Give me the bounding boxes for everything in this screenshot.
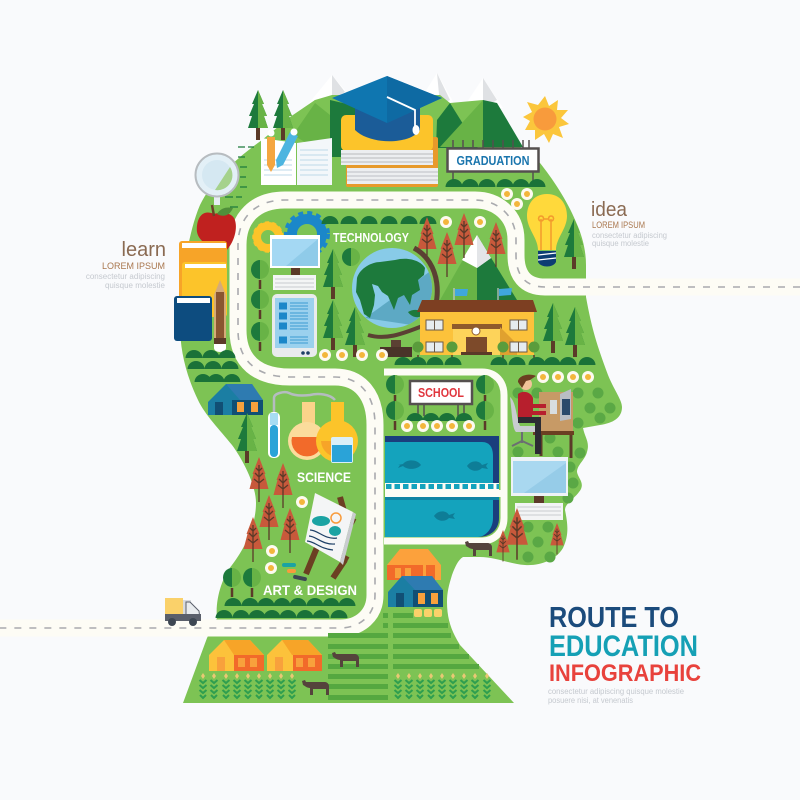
learn text block: learn	[122, 239, 166, 261]
icon: graduation books	[341, 115, 438, 187]
learn text block: LOREM IPSUM	[102, 261, 165, 271]
main road	[0, 200, 800, 628]
title: INFOGRAPHIC	[549, 660, 701, 687]
title caption: consectetur adipiscing quisque molestie	[548, 687, 685, 696]
technology label: TECHNOLOGY	[333, 231, 410, 245]
idea text block: LOREM IPSUM	[592, 220, 645, 230]
corn rows	[200, 673, 490, 698]
trees and bushes in technology section	[251, 216, 436, 357]
school building	[417, 288, 537, 355]
icon: truck	[165, 598, 201, 626]
person at desk	[510, 375, 574, 458]
title caption: posuere nisi, at venenatis	[548, 696, 633, 705]
flowers and bushes along technology base	[319, 349, 596, 365]
orange house	[387, 549, 441, 580]
icon: tree by bulb	[564, 219, 584, 269]
learn text block: consectetur adipiscing	[86, 272, 165, 281]
large monitor and keyboard	[511, 457, 568, 520]
pond with fish and bridge	[385, 436, 503, 537]
icon: cow by pond	[465, 541, 492, 556]
graduation sign: GRADUATION	[456, 154, 530, 168]
secondary road around school pond	[384, 372, 504, 541]
small shrubs at school	[412, 342, 540, 362]
title: EDUCATION	[549, 630, 698, 663]
bushes under sign	[446, 179, 546, 187]
field dashes near magnifier	[222, 147, 254, 207]
cows in field	[302, 652, 359, 695]
science label: SCIENCE	[297, 469, 351, 485]
icon: learn books	[174, 241, 227, 341]
school sign and trees	[386, 375, 494, 432]
field stripes	[328, 613, 479, 700]
learn text block	[86, 239, 166, 290]
flowers near bulb	[501, 188, 533, 210]
mountains behind head top	[280, 73, 503, 135]
icon: graduation cap	[332, 76, 442, 141]
bushes left rows	[186, 350, 240, 382]
school sign and trees: SCHOOL	[418, 386, 464, 400]
farm houses	[209, 640, 322, 671]
science flasks	[268, 392, 358, 463]
flowers art section	[265, 496, 308, 574]
red trees in science section	[244, 457, 300, 562]
flowers near person	[537, 371, 594, 383]
mountain: behind cap and graduation sign	[293, 100, 523, 157]
idea text block: consectetur adipiscing	[592, 231, 667, 240]
green dots on face	[512, 388, 616, 562]
icon: light bulb	[527, 194, 567, 266]
title: ROUTE TO	[549, 602, 679, 634]
bushes art section rows	[216, 598, 356, 618]
mountain behind school	[440, 235, 517, 300]
trees right of school	[543, 303, 585, 357]
art and design label: ART & DESIGN	[263, 582, 357, 598]
blue house left	[208, 384, 263, 415]
idea text block: idea	[591, 199, 628, 221]
crayons	[282, 563, 307, 581]
icon: open book and pencils	[261, 128, 332, 185]
title caption	[548, 687, 685, 705]
icon: tablet	[272, 294, 317, 357]
red trees upper	[418, 213, 506, 277]
icon: trees top left	[248, 90, 293, 140]
icon: sun	[523, 96, 569, 143]
blue house	[388, 576, 443, 607]
easel with painting	[305, 493, 356, 578]
icon: apple	[197, 205, 236, 251]
idea text block	[591, 199, 667, 248]
red trees on jaw	[496, 508, 564, 562]
icon: pencil	[214, 280, 226, 352]
title	[549, 602, 701, 687]
learn text block: quisque molestie	[105, 281, 166, 290]
icon: gears	[254, 213, 328, 255]
tree beside science	[237, 413, 257, 463]
graduation sign	[448, 140, 538, 181]
trees art section	[223, 568, 261, 597]
idea text block: quisque molestie	[592, 239, 650, 248]
head silhouette	[180, 95, 622, 703]
icon: globe	[352, 248, 437, 357]
icon: magnifier	[196, 154, 238, 205]
hay bales	[414, 609, 442, 617]
icon: computer	[270, 235, 320, 290]
